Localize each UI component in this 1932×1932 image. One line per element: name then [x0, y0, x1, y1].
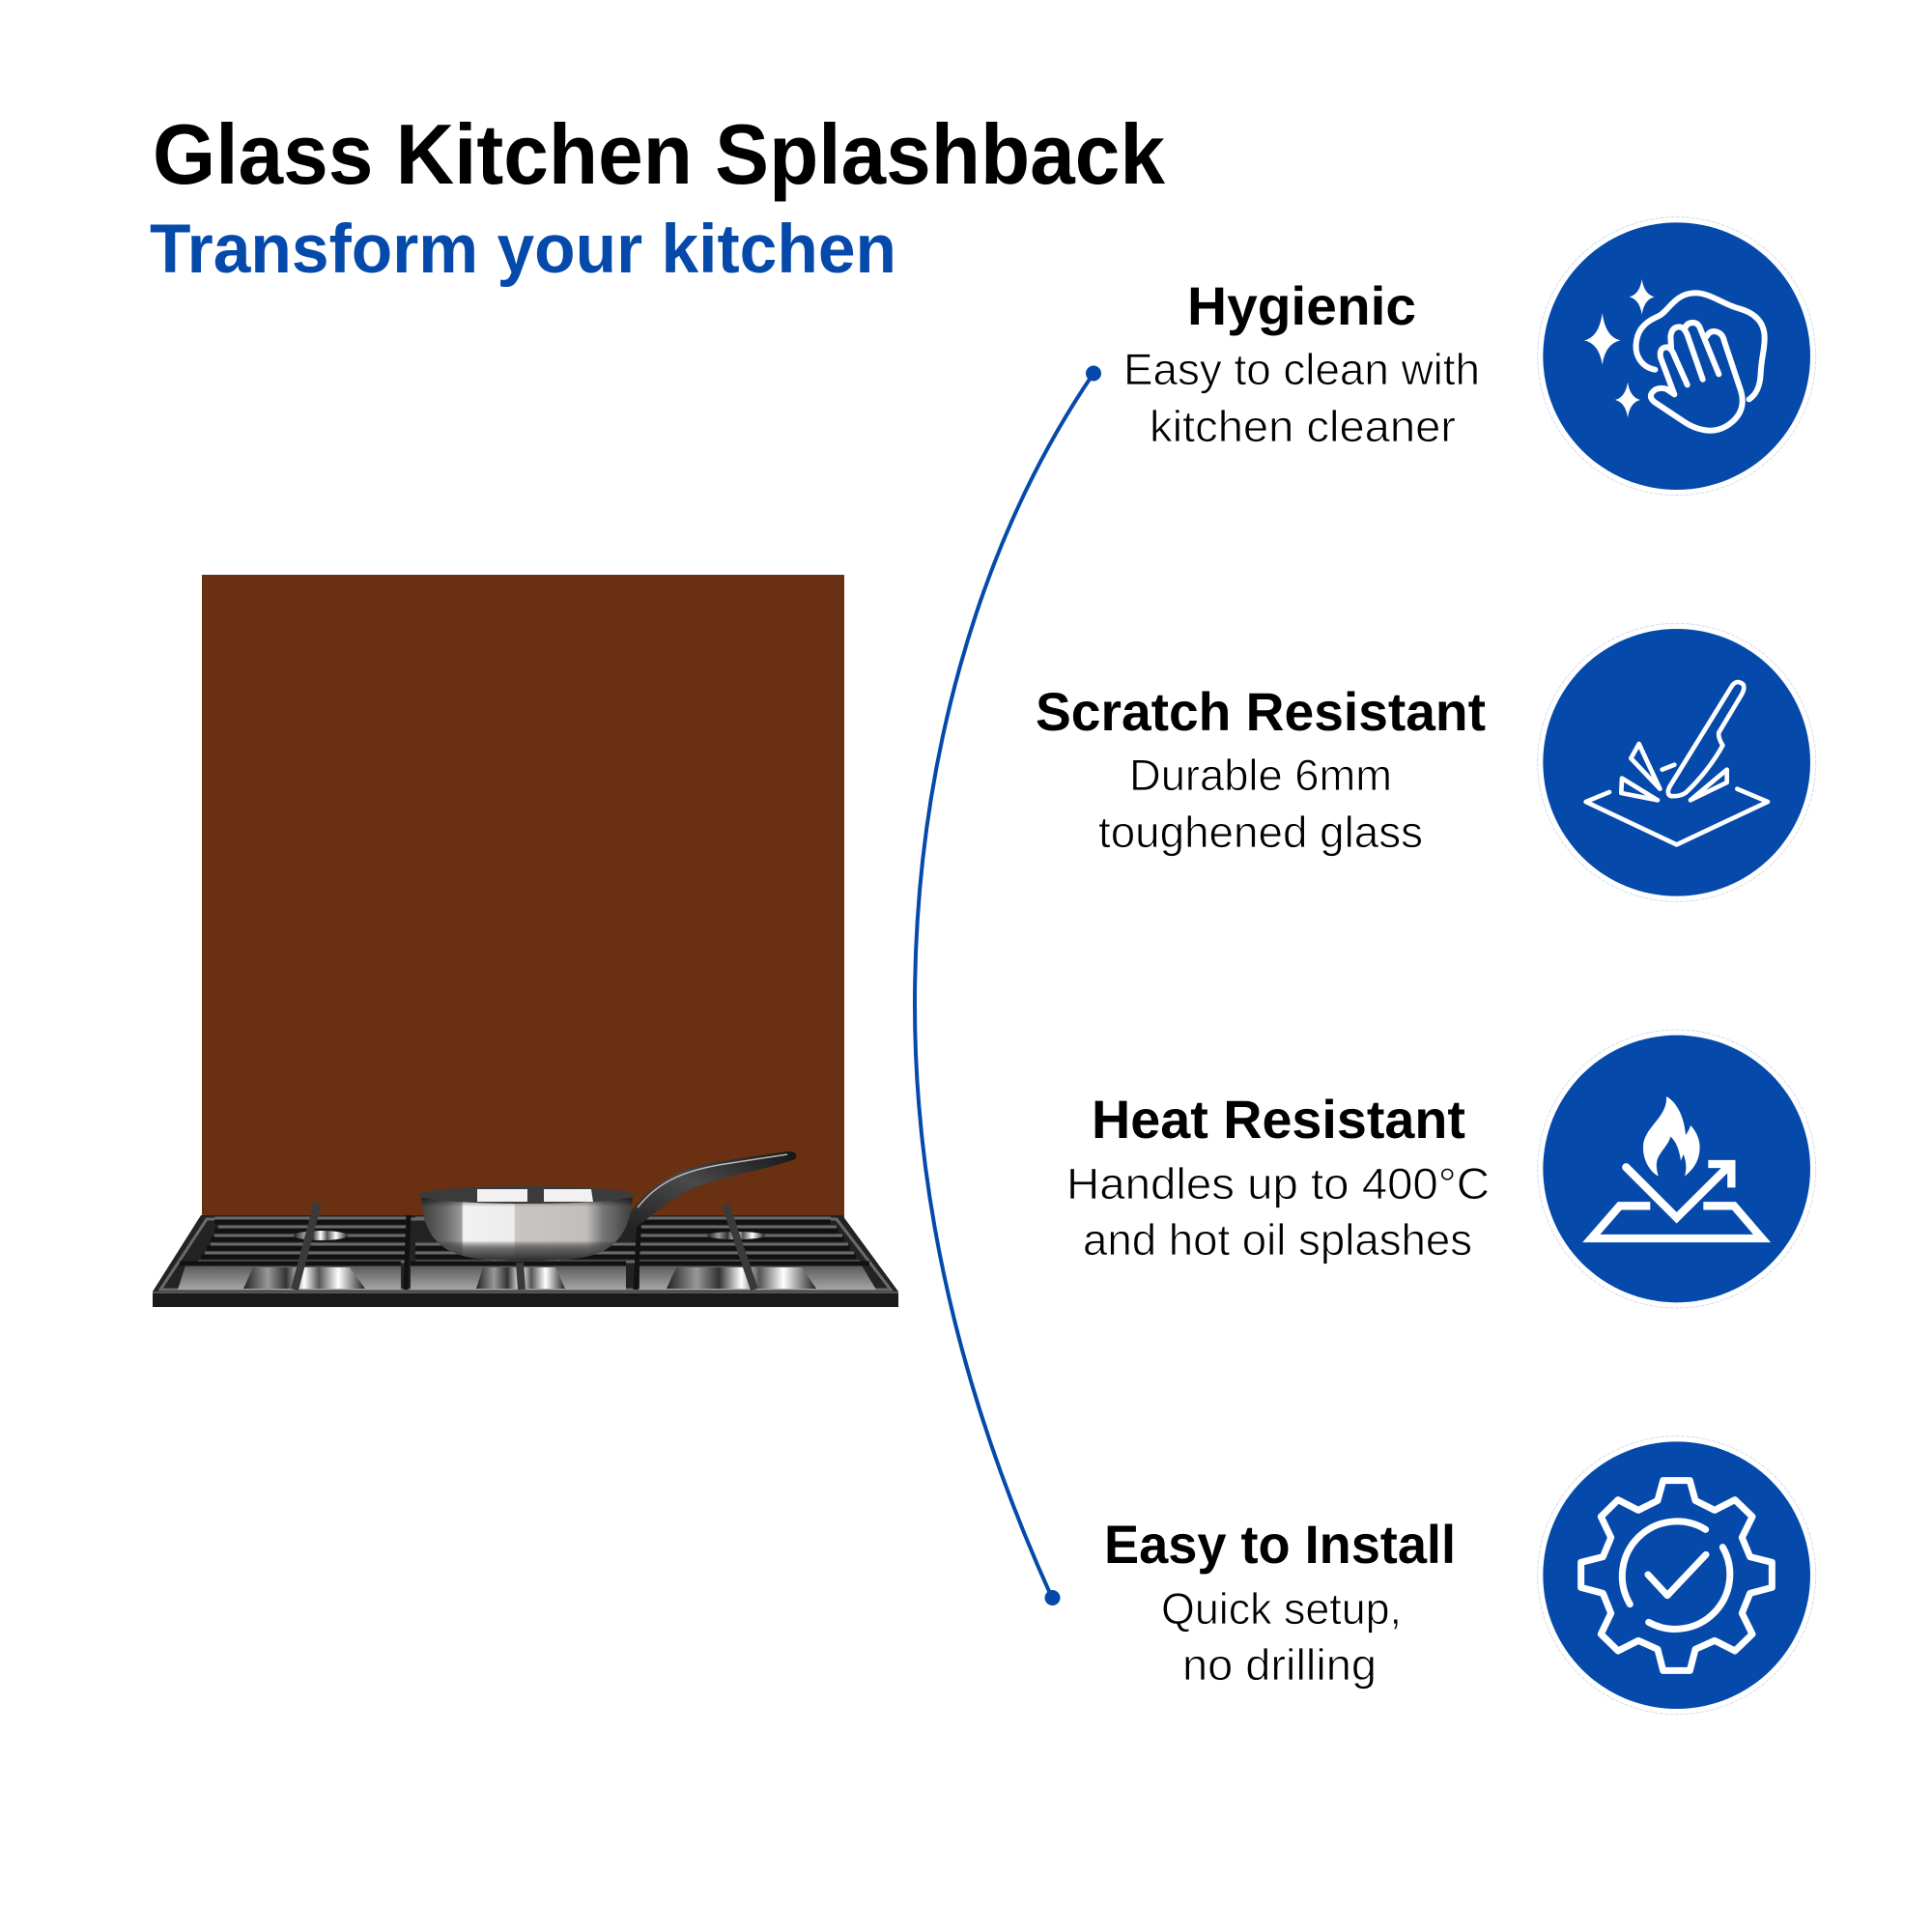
feature: Heat Resistant: Handles up to 400°C — [1066, 1159, 1490, 1208]
feature: Hygienic: kitchen cleaner — [1150, 402, 1456, 451]
title: Glass Kitchen Splashback — [153, 106, 1166, 202]
feature: Scratch Resistant — [1036, 681, 1486, 857]
product image: splashback over hob — [153, 575, 898, 1307]
feature: Scratch Resistant: Scratch Resistant — [1036, 681, 1486, 742]
icon: gear with check mark — [1538, 1436, 1816, 1715]
feature: Hygienic — [1123, 275, 1480, 451]
icon: knife on glass — [1538, 623, 1816, 901]
frying pan — [418, 1151, 796, 1261]
feature: Easy to Install: Easy to Install — [1104, 1514, 1456, 1575]
gas hob — [153, 1203, 898, 1307]
subtitle: Transform your kitchen — [150, 212, 896, 288]
icon: hand wiping — [1538, 217, 1816, 496]
feature: Hygienic: Hygienic — [1187, 275, 1416, 336]
icon: flame reflecting off surface — [1538, 1030, 1816, 1308]
feature: Easy to Install — [1104, 1514, 1456, 1690]
feature: Heat Resistant: and hot oil splashes — [1083, 1215, 1472, 1264]
feature: Hygienic: Easy to clean with — [1123, 345, 1480, 394]
feature: Heat Resistant — [1066, 1089, 1490, 1264]
feature: Easy to Install: no drilling — [1182, 1640, 1377, 1690]
feature: Heat Resistant: Heat Resistant — [1092, 1089, 1465, 1150]
feature: Scratch Resistant: toughened glass — [1098, 808, 1423, 857]
feature: Scratch Resistant: Durable 6mm — [1129, 751, 1392, 800]
brown glass splashback panel — [202, 575, 844, 1232]
burners — [243, 1231, 816, 1289]
feature: Easy to Install: Quick setup, — [1161, 1584, 1402, 1634]
connector curve with end dots — [915, 365, 1101, 1605]
